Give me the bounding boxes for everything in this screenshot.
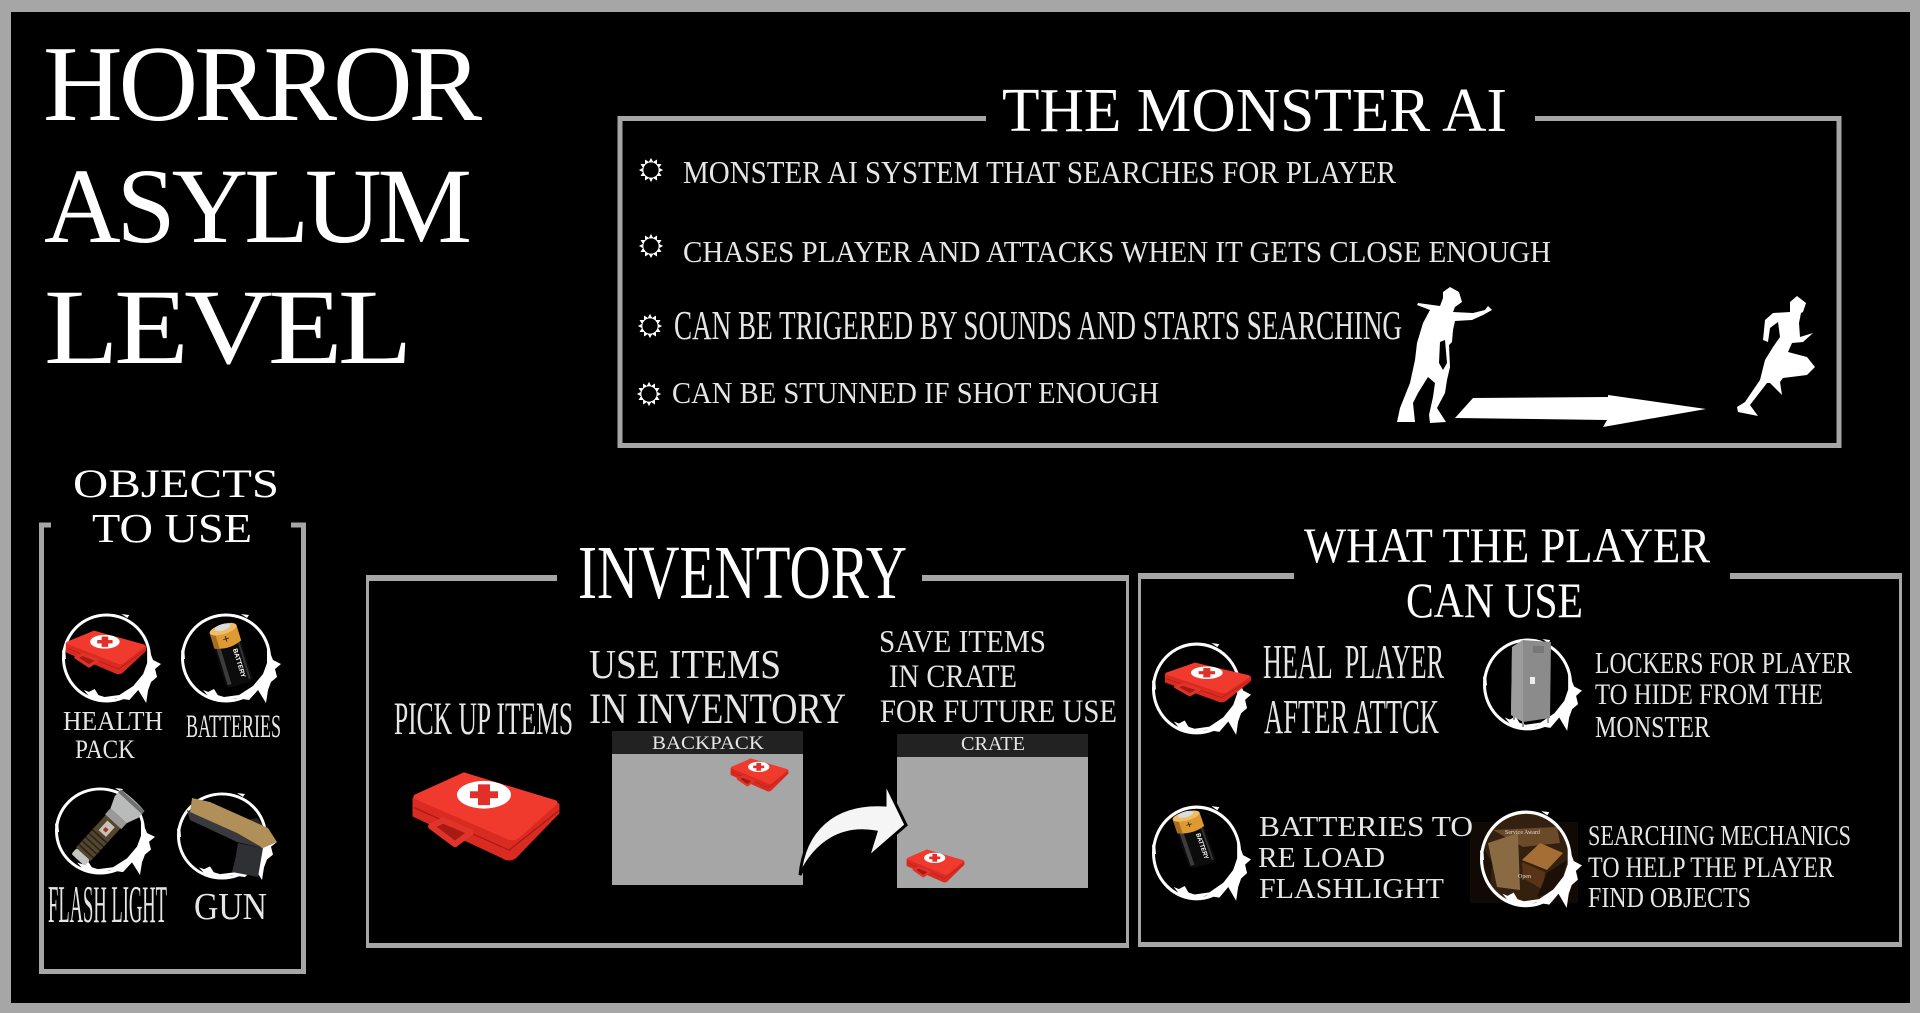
item: searching mechanics xyxy=(1470,810,1851,914)
step: pick up items: PICK UP ITEMS xyxy=(394,693,573,745)
icon: bullet 3 xyxy=(638,314,662,338)
item: batteries reload: FLASHLIGHT xyxy=(1259,873,1444,905)
heading: inventory: INVENTORY xyxy=(578,531,907,615)
item: heal player xyxy=(1152,634,1444,744)
item: lockers: MONSTER xyxy=(1595,709,1710,744)
panel: the monster AI xyxy=(620,77,1839,446)
item: searching mechanics: Open xyxy=(1518,874,1531,880)
title: HORROR xyxy=(43,25,482,144)
step: use items in inventory: IN INVENTORY xyxy=(589,686,846,733)
panel: objects to use xyxy=(42,461,304,972)
item: batteries reload xyxy=(1152,806,1473,905)
item: lockers: LOCKERS FOR PLAYER xyxy=(1595,645,1852,680)
item: health pack: PACK xyxy=(75,735,135,764)
panel: inventory xyxy=(366,531,1129,946)
icon: bullet 2 xyxy=(639,234,663,258)
text: stunned: CAN BE STUNNED IF SHOT ENOUGH xyxy=(672,375,1159,410)
heading: objects to use xyxy=(73,461,279,551)
item: batteries xyxy=(181,614,281,745)
item: batteries: BATTERIES xyxy=(186,709,281,745)
heading: the monster AI: THE MONSTER AI xyxy=(1002,77,1507,145)
heading: what the player can use xyxy=(1304,517,1711,628)
step: save items in crate: CRATE xyxy=(961,733,1025,755)
item: health pack xyxy=(62,614,163,764)
item: searching mechanics: TO HELP THE PLAYER xyxy=(1588,851,1834,884)
title: LEVEL xyxy=(44,269,408,387)
text: searches for player: MONSTER AI SYSTEM THAT SEARCHES FOR PLAYER xyxy=(683,154,1397,190)
title xyxy=(43,25,482,387)
item: gun xyxy=(177,793,277,928)
item: heal player: HEAL PLAYER xyxy=(1263,634,1444,689)
item: health pack: HEALTH xyxy=(63,706,163,736)
item: searching mechanics: Service Award xyxy=(1505,830,1540,836)
item: lockers: TO HIDE FROM THE xyxy=(1595,678,1823,711)
step: use items in inventory xyxy=(589,641,846,885)
step: save items in crate xyxy=(879,623,1117,888)
panel: what the player can use xyxy=(1138,517,1902,944)
arrow: backpack to crate xyxy=(800,782,906,875)
heading: what the player can use: CAN USE xyxy=(1406,572,1583,628)
panel: objects to use: FLASH LIGHT xyxy=(48,876,167,934)
arrow: monster chases player xyxy=(1455,395,1706,427)
item: batteries reload: RE LOAD xyxy=(1258,842,1385,874)
icon: running player silhouette xyxy=(1737,296,1815,416)
step: save items in crate: FOR FUTURE USE xyxy=(880,694,1117,730)
item: batteries reload: BATTERIES TO xyxy=(1259,811,1473,843)
text: chases player: CHASES PLAYER AND ATTACKS WHEN IT GETS CLOSE ENOUGH xyxy=(683,234,1551,269)
step: use items in inventory: USE ITEMS xyxy=(589,641,781,687)
item: lockers xyxy=(1483,639,1852,744)
heading: what the player can use: WHAT THE PLAYER xyxy=(1304,517,1711,573)
item: gun: GUN xyxy=(194,886,267,928)
heading: objects to use: TO USE xyxy=(92,505,252,551)
step: use items in inventory: BACKPACK xyxy=(652,733,764,754)
step: save items in crate: SAVE ITEMS xyxy=(879,623,1046,659)
item: heal player: AFTER ATTCK xyxy=(1264,689,1439,744)
icon: bullet 1 xyxy=(639,158,663,182)
icon: bullet 4 xyxy=(637,382,661,406)
step: save items in crate: IN CRATE xyxy=(889,659,1017,695)
step: pick up items xyxy=(394,693,573,859)
text: triggered by sounds: CAN BE TRIGERED BY SOUNDS AND STARTS SEARCHING xyxy=(674,302,1402,348)
heading: objects to use: OBJECTS xyxy=(73,461,279,506)
title: ASYLUM xyxy=(44,148,469,266)
icon: monster silhouette xyxy=(1397,287,1492,423)
item: searching mechanics: FIND OBJECTS xyxy=(1588,882,1751,914)
item: flash light xyxy=(48,788,167,934)
